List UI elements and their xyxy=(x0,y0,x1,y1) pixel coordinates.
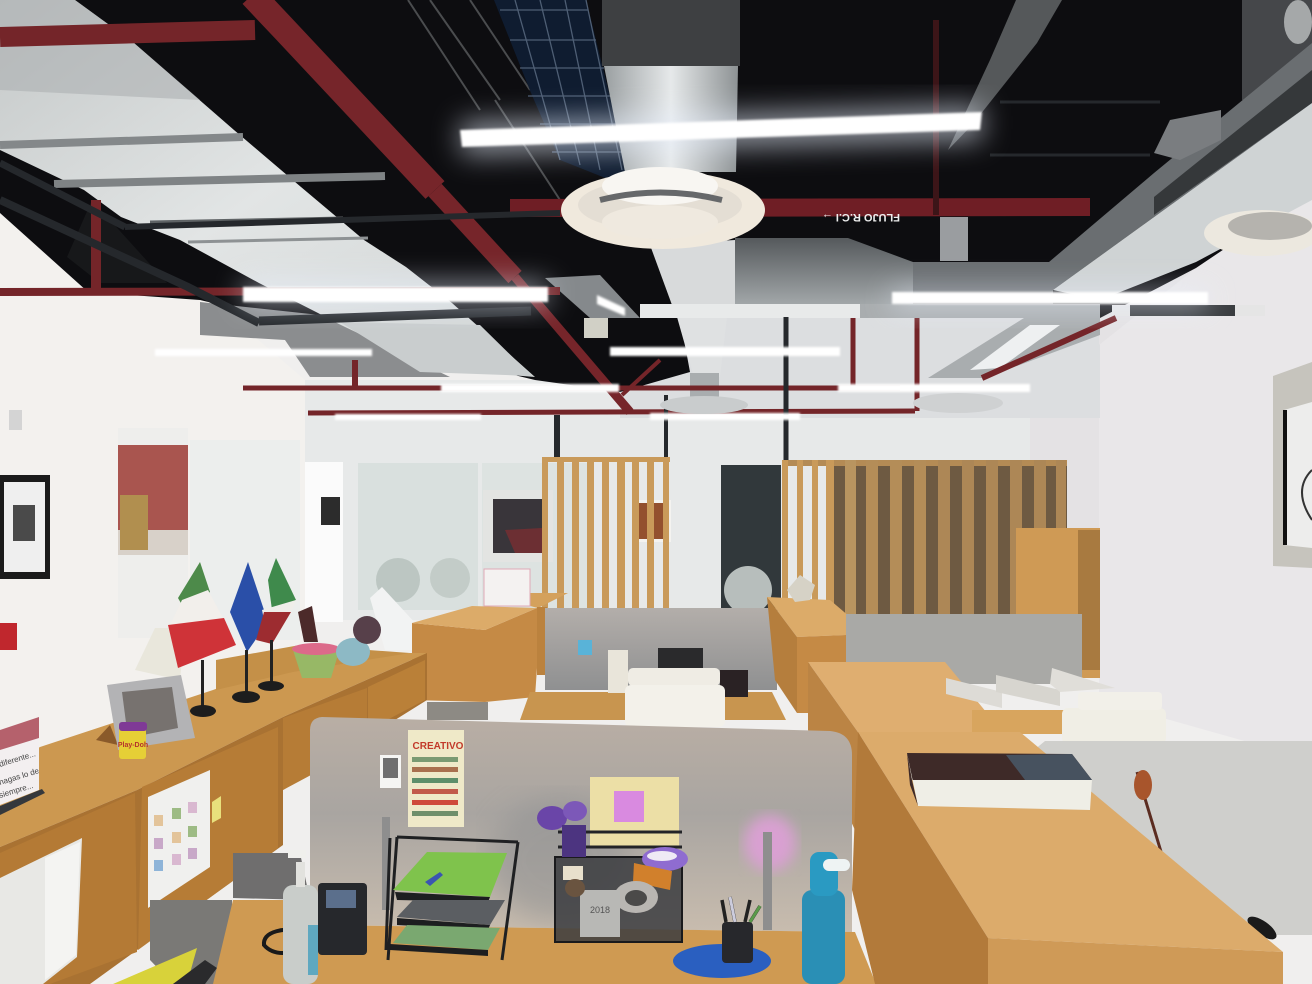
wooden shelf at back right xyxy=(1016,528,1100,678)
wall art right xyxy=(1273,362,1312,568)
polaroid xyxy=(380,755,401,788)
water bottle xyxy=(802,852,850,984)
main desk partition xyxy=(310,717,852,932)
desk flags xyxy=(168,558,296,717)
dark beams and rods xyxy=(0,102,1160,460)
file tray xyxy=(386,837,518,960)
black dark patch under beams xyxy=(67,200,167,283)
left sideboard: Play-Doh xyxy=(118,742,148,749)
play-doh tub xyxy=(119,724,146,759)
colour swatches xyxy=(154,802,197,871)
sanitizer bottle xyxy=(283,850,318,984)
poster: creativo: CREATIVO xyxy=(413,741,464,752)
round air diffusers xyxy=(561,167,1312,414)
right middle desk with binders xyxy=(808,662,1166,830)
mesh organizer xyxy=(537,801,688,942)
main desk surface xyxy=(213,853,876,984)
left silver ceiling band xyxy=(0,0,535,377)
fluorescent lights xyxy=(155,112,1208,420)
grey column and rods xyxy=(408,0,560,200)
right frosted panel xyxy=(1028,741,1312,943)
book on desk xyxy=(907,753,1092,810)
right front desk xyxy=(852,732,1283,984)
glass meeting rooms xyxy=(358,463,781,650)
poster: creativo xyxy=(408,730,464,827)
mesh organizer: 2018 xyxy=(590,905,610,915)
sign on sideboard xyxy=(0,717,45,815)
left glass room xyxy=(118,428,343,680)
left sideboard xyxy=(0,645,427,984)
red pipes xyxy=(0,0,1116,413)
purple toys xyxy=(537,801,688,871)
photo frame xyxy=(96,725,118,745)
yellow paper and dark binder xyxy=(150,900,232,984)
wall art left xyxy=(0,410,50,650)
back desks and partitions xyxy=(412,569,1082,727)
cable tray xyxy=(494,0,628,187)
ceiling xyxy=(0,0,1312,460)
light glow xyxy=(243,105,1208,308)
clipboard document xyxy=(148,770,210,908)
pipe label: FLUJO R.C.I → xyxy=(822,211,900,223)
yellow folder and sticky note xyxy=(590,777,679,847)
wooden slat screens xyxy=(542,457,1067,615)
hvac ducts xyxy=(545,0,1312,399)
recessed grey box above back wall xyxy=(200,302,532,377)
pen cup and mouse pad xyxy=(673,897,771,978)
potted plant and ornament xyxy=(292,606,381,678)
phone xyxy=(264,883,367,955)
